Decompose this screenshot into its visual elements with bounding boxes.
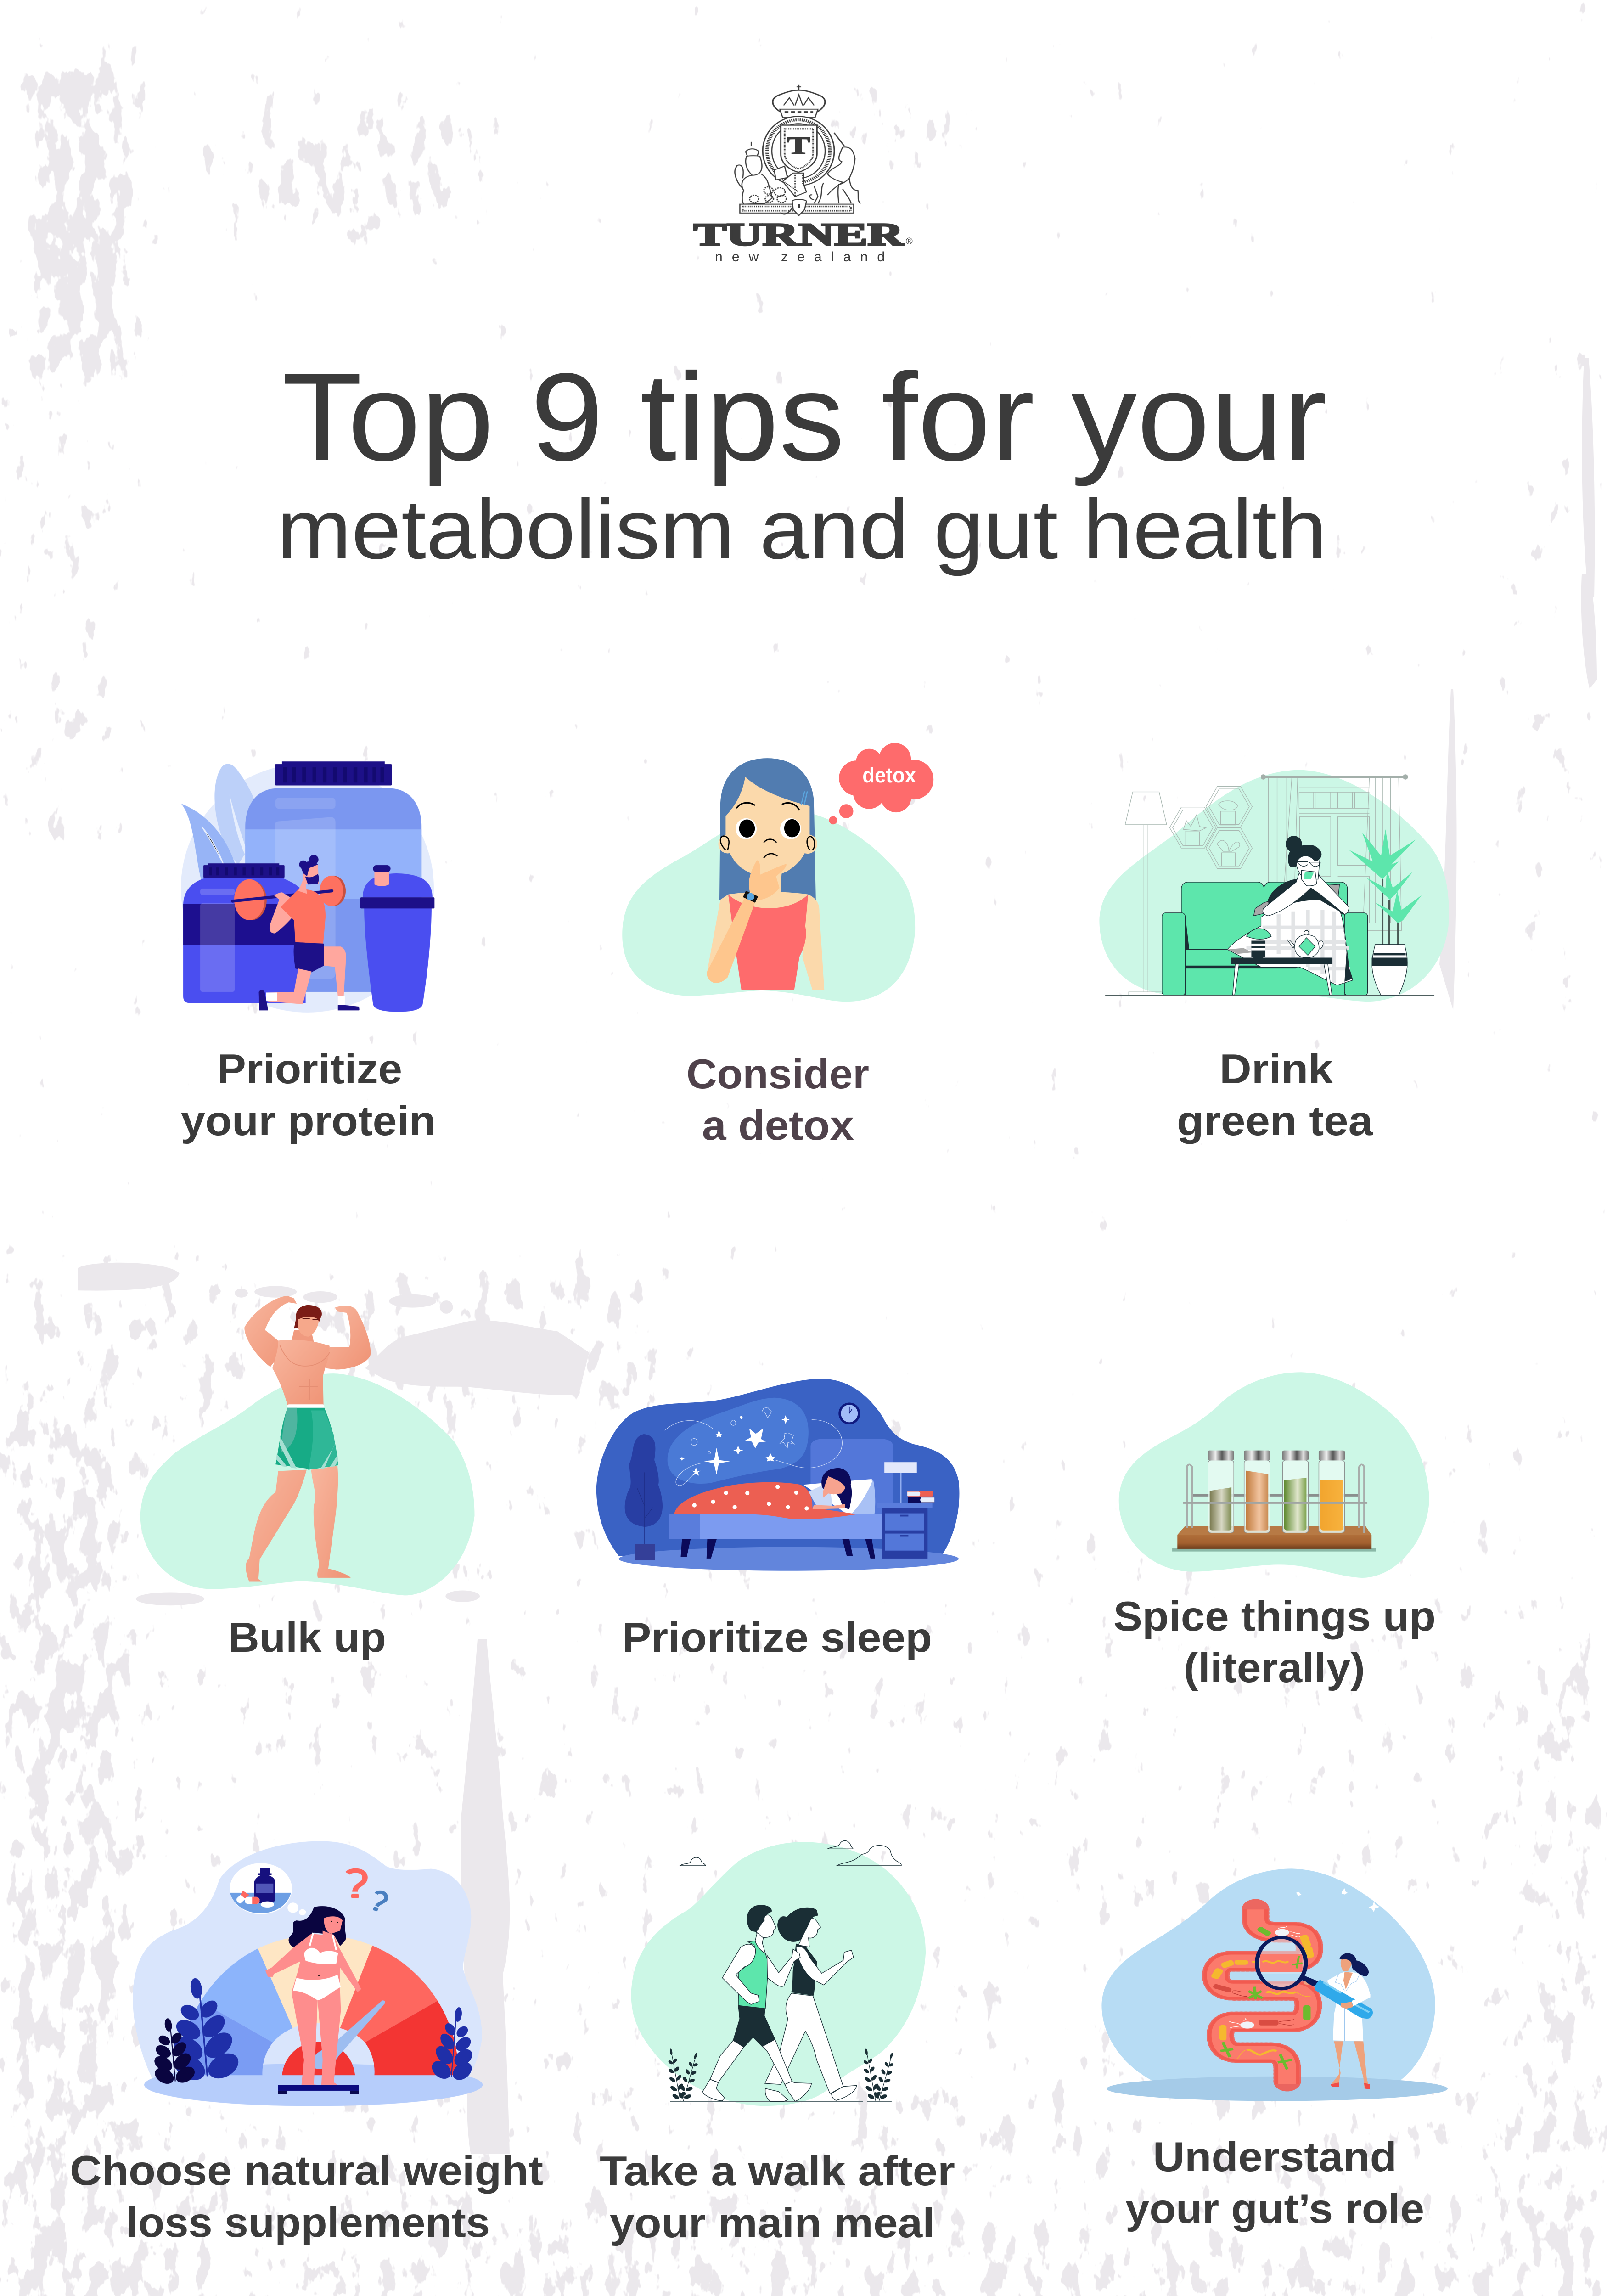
label: Take a walk after your main meal: your main meal bbox=[610, 2200, 935, 2246]
label: Spice things up (literally): Spice things up bbox=[1113, 1593, 1436, 1640]
label: Take a walk after your main meal bbox=[600, 2148, 955, 2246]
tagline: new zealand: new zealand bbox=[715, 249, 885, 264]
label: Consider a detox bbox=[686, 1051, 869, 1149]
doctor bbox=[1327, 1953, 1371, 2089]
magnifying glass bbox=[1257, 1937, 1373, 2019]
label: Choose natural weight loss supplements: Choose natural weight bbox=[70, 2148, 543, 2194]
nightstand, lamp and books bbox=[877, 1462, 934, 1559]
panel: consider a detox bbox=[622, 743, 933, 1149]
panel: understand your gut's role bbox=[1101, 1868, 1448, 2232]
registered mark: ® bbox=[906, 236, 913, 247]
illustration: protein jars and man lifting bbox=[181, 761, 434, 1013]
label: Bulk up: Bulk up bbox=[228, 1615, 386, 1661]
illustration: woman sleeping in bed bbox=[596, 1379, 959, 1571]
question marks bbox=[348, 1871, 386, 1911]
label: Understand your gut's role: Understand bbox=[1153, 2134, 1397, 2180]
man with barbell bbox=[232, 855, 360, 1010]
panel: take a walk after your main meal bbox=[600, 1841, 955, 2246]
label: Understand your gut's role bbox=[1125, 2134, 1424, 2232]
protein shaker bbox=[360, 865, 434, 1012]
title line 1: Top 9 tips for your bbox=[282, 347, 1327, 488]
scale platform bbox=[278, 2085, 359, 2091]
thought bubble with supplements bbox=[230, 1863, 306, 1915]
teapot bbox=[1287, 930, 1323, 958]
man walking bbox=[702, 1905, 811, 2101]
illustration: thinking woman bbox=[622, 743, 933, 1002]
label: Spice things up (literally): (literally) bbox=[1184, 1645, 1365, 1691]
coffee table bbox=[1231, 958, 1332, 995]
panel: prioritize your protein bbox=[181, 761, 436, 1144]
panel: spice things up bbox=[1113, 1372, 1436, 1691]
intestine bbox=[1216, 1909, 1309, 2084]
label: Prioritize your protein bbox=[181, 1046, 436, 1144]
panel: prioritize sleep bbox=[596, 1379, 959, 1661]
title line 2: metabolism and gut health bbox=[277, 482, 1327, 576]
label: Drink green tea: Drink bbox=[1219, 1046, 1333, 1092]
woman walking bbox=[765, 1908, 857, 2101]
bed bbox=[669, 1468, 883, 1559]
small jar bbox=[183, 863, 306, 1003]
bacteria bbox=[1210, 1926, 1315, 2069]
illustration: flexing bodybuilder bbox=[140, 1296, 475, 1595]
woman and blanket bbox=[1227, 879, 1353, 985]
illustration: spice jar rack bbox=[1119, 1372, 1429, 1578]
plant bbox=[625, 1434, 663, 1560]
illustration: woman on sofa drinking tea bbox=[1099, 770, 1449, 1002]
label: Drink green tea bbox=[1177, 1046, 1373, 1144]
thought bubble word: detox bbox=[862, 763, 916, 787]
illustration: woman on scale with gauge bbox=[133, 1841, 483, 2106]
wordmark: TURNER: TURNER bbox=[693, 217, 905, 253]
sofa bbox=[1162, 882, 1368, 996]
label: Spice things up (literally) bbox=[1113, 1593, 1436, 1691]
label: Consider a detox: a detox bbox=[702, 1103, 854, 1149]
label: Choose natural weight loss supplements: loss supplements bbox=[126, 2200, 490, 2246]
potted palm bbox=[1349, 829, 1422, 996]
clock bbox=[838, 1402, 860, 1424]
dream stars bbox=[680, 1415, 790, 1476]
icon: royal crest bbox=[735, 85, 861, 215]
panel: drink green tea bbox=[1099, 770, 1449, 1144]
label: Understand your gut's role: your gut’s role bbox=[1125, 2186, 1424, 2232]
sprigs bbox=[664, 2048, 901, 2103]
large jar bbox=[245, 761, 421, 992]
title bbox=[277, 347, 1327, 576]
logo: Turner New Zealand crest bbox=[693, 85, 913, 264]
panel: bulk up bbox=[140, 1296, 475, 1661]
gauge bbox=[178, 1935, 458, 2075]
illustration: doctor examining intestine bbox=[1101, 1868, 1448, 2101]
leaf sprigs bbox=[152, 1977, 474, 2087]
illustration: couple walking bbox=[631, 1841, 926, 2106]
label: Drink green tea: green tea bbox=[1177, 1098, 1373, 1144]
clouds bbox=[680, 1841, 901, 1866]
wooden base bbox=[1177, 1526, 1371, 1535]
woman bbox=[265, 1906, 361, 2085]
label: Prioritize your protein: your protein bbox=[181, 1098, 436, 1144]
label: Prioritize sleep: Prioritize sleep bbox=[622, 1615, 932, 1661]
label: Consider a detox: Consider bbox=[686, 1051, 869, 1097]
needle bbox=[311, 2000, 385, 2069]
label: Take a walk after your main meal: Take a walk after bbox=[600, 2148, 955, 2195]
jars bbox=[1208, 1451, 1345, 1533]
label: Choose natural weight loss supplements bbox=[70, 2148, 543, 2246]
panel: natural weight loss supplements bbox=[70, 1841, 543, 2246]
label: Prioritize your protein: Prioritize bbox=[217, 1046, 402, 1092]
T monogram: T bbox=[787, 132, 810, 159]
